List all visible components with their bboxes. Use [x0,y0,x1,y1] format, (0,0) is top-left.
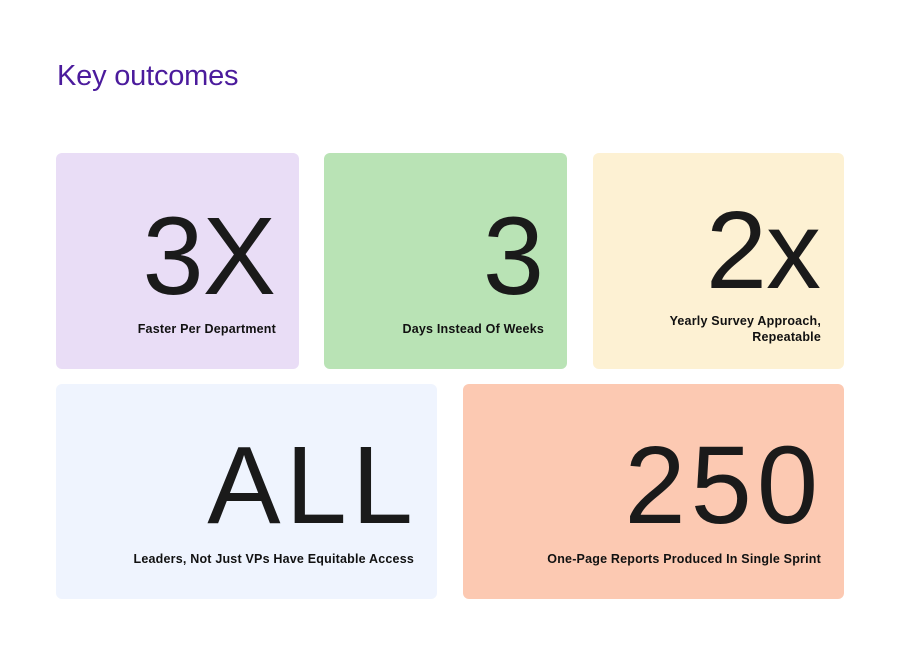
number: 2x [706,189,820,312]
card: 3 days [324,153,567,369]
label: Faster Per Department [138,322,276,336]
title: Key outcomes [57,60,238,92]
card: 250 [463,384,844,599]
card: 3X [56,153,299,369]
card: 2x [593,153,844,369]
label [670,314,821,344]
label: One-Page Reports Produced In Single Sprint [547,552,821,566]
number: 3X [142,195,275,318]
number: 3 [483,195,543,318]
label: Yearly Survey Approach, [670,314,821,328]
label: Days Instead Of Weeks [402,322,544,336]
label: Leaders, Not Just VPs Have Equitable Access [134,552,414,566]
number: ALL [207,424,418,547]
label: Repeatable [752,330,821,344]
number: 250 [624,424,823,547]
card: ALL [56,384,437,599]
